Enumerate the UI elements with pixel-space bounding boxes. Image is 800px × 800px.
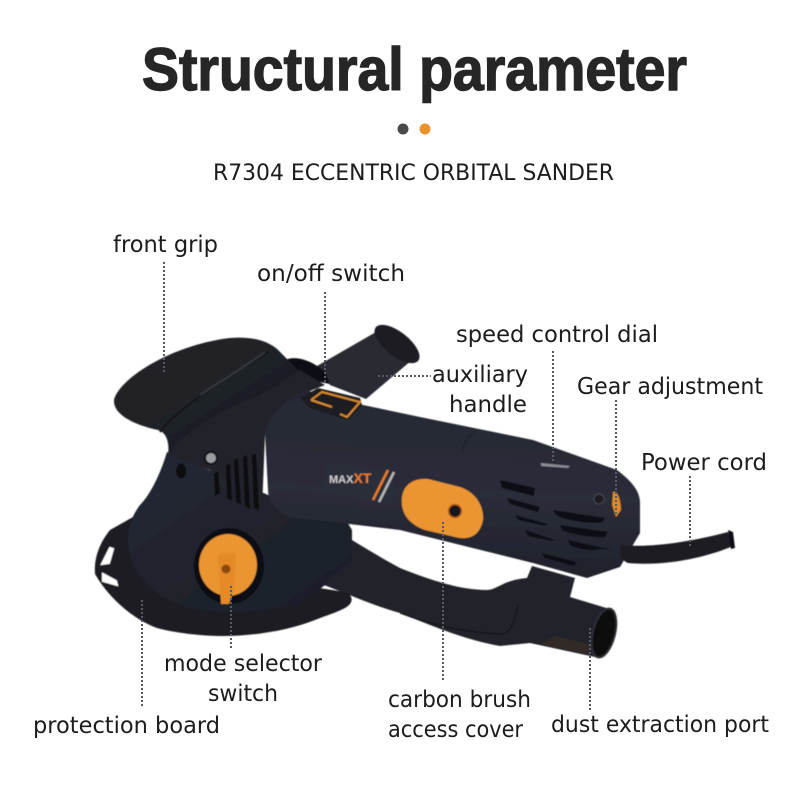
auxiliary handle: [317, 318, 426, 399]
decorative dots: [398, 124, 430, 134]
label: auxiliary handle: handle: [449, 392, 527, 418]
brand badge: [325, 462, 394, 505]
labels: [33, 232, 769, 743]
protection board: [95, 517, 352, 636]
grip collar: [168, 370, 325, 510]
on/off switch: [300, 388, 362, 420]
label: gear adjustment: Gear adjustment: [577, 374, 763, 400]
dust port opening: [587, 606, 621, 660]
mode selector switch: [194, 528, 264, 604]
power cord: [620, 530, 735, 564]
gear adjustment wheel: [594, 492, 621, 517]
label: carbon brush access cover: [388, 687, 531, 743]
screw: [205, 452, 217, 464]
label: mode selector switch: [164, 651, 323, 707]
product illustration: orbital sander: [95, 318, 735, 660]
label: carbon brush access cover: carbon brush: [388, 687, 531, 713]
motor vents: [500, 480, 612, 566]
label: on/off switch: on/off switch: [257, 261, 405, 287]
label: speed control dial: speed control dial: [456, 322, 658, 348]
carbon brush access cover: [402, 479, 483, 538]
label: carbon brush access cover: access cover: [388, 717, 523, 743]
side vents: [176, 454, 259, 510]
label: mode selector switch: switch: [208, 681, 278, 707]
main motor tube: [265, 390, 640, 578]
label: mode selector switch: mode selector: [164, 651, 323, 677]
brand badge: MAXXT: [329, 470, 372, 486]
label: auxiliary handle: [432, 362, 528, 418]
base housing: [128, 452, 352, 612]
label: power cord: Power cord: [641, 450, 767, 476]
title: Structural parameter: [142, 36, 687, 103]
subtitle: R7304 ECCENTRIC ORBITAL SANDER: [213, 161, 614, 186]
D handle and dust port: [307, 537, 621, 660]
label: front grip: front grip: [113, 232, 218, 258]
front grip: [114, 338, 300, 455]
leader lines: [142, 262, 690, 710]
speed control dial: [541, 463, 570, 468]
label: auxiliary handle: auxiliary: [432, 362, 528, 388]
label: dust extraction port: dust extraction port: [551, 712, 769, 738]
label: protection board: protection board: [33, 713, 220, 739]
aperture behind switch: [285, 358, 330, 384]
